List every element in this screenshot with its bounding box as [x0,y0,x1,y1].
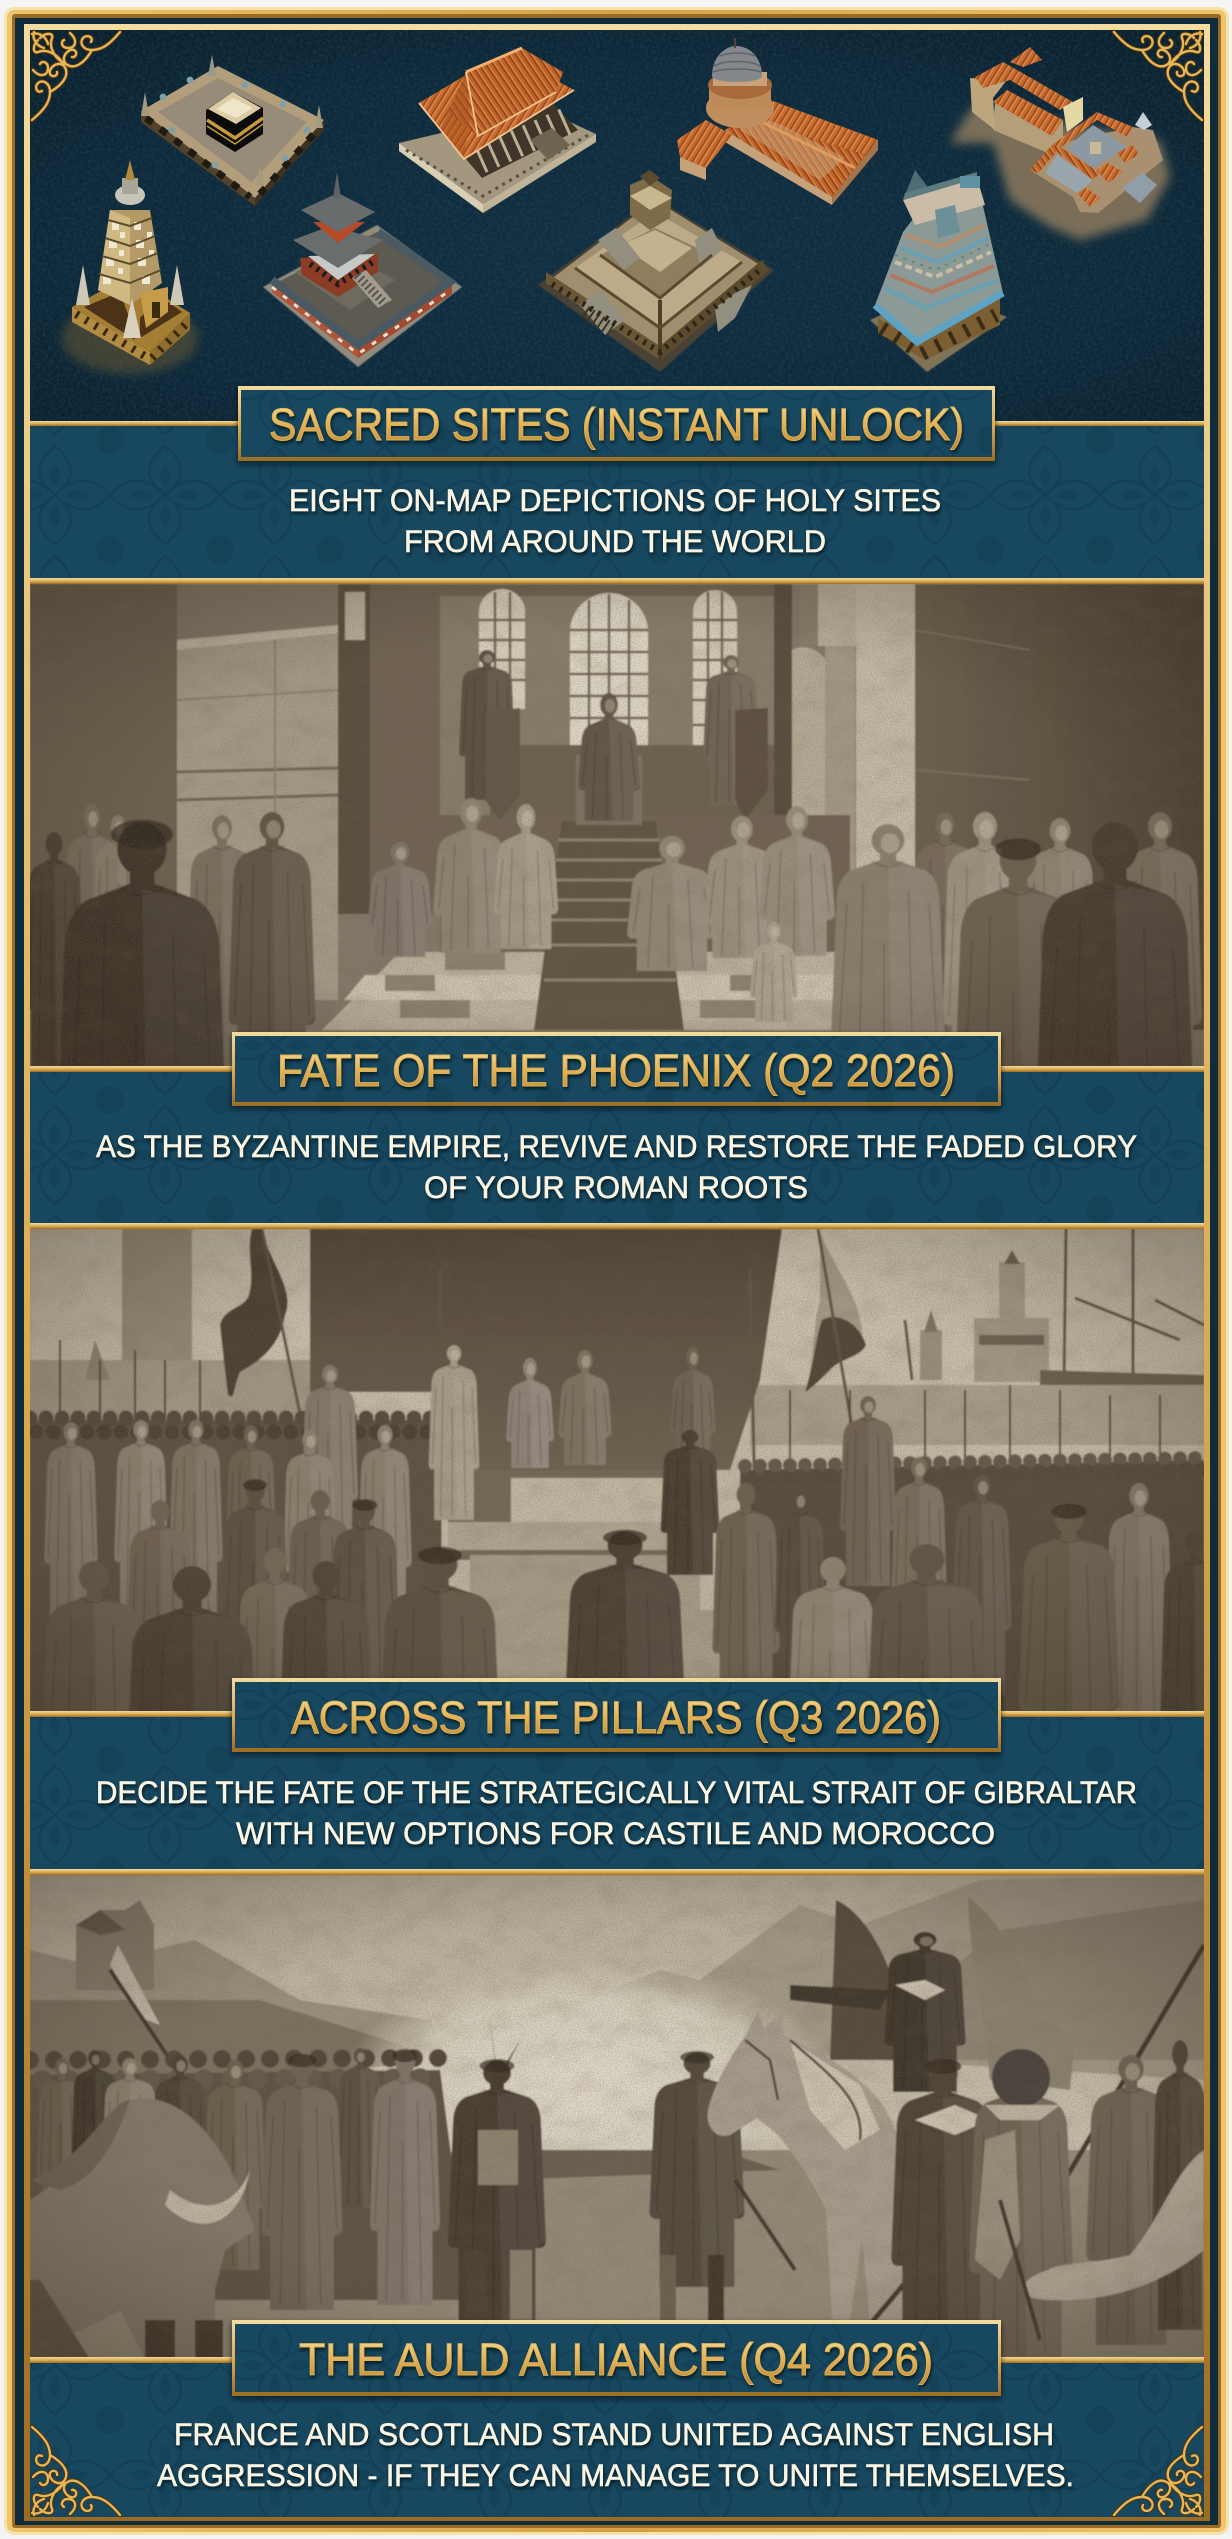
lake [340,1960,840,2210]
corner ornament: top right [1114,32,1202,120]
hills left [30,1940,450,2060]
halberd [110,1945,160,2025]
description band: pillars [30,1711,1204,1875]
corner ornament: bottom left [32,2427,120,2515]
title box: phoenix: FATE OF THE PHOENIX (Q2 2026) [277,1045,955,1096]
heading rule and description band [30,421,1204,584]
title box: sacred sites [238,386,995,461]
soldiers [302,1365,358,1555]
description band: auld alliance [30,2357,1204,2517]
crowd right [916,812,968,1032]
title box: pillars: ACROSS THE PILLARS (Q3 2026) [291,1692,941,1743]
description: phoenix: AS THE BYZANTINE EMPIRE, REVIVE AND RESTORE THE FADED GLORY [96,1128,1137,1164]
building: Mahabodhi temple [62,160,198,374]
description: phoenix [96,1128,1137,1205]
left crowd [30,2070,470,2300]
crowd left [68,804,111,904]
panel: across the pillars [30,1229,1228,1946]
corner ornament: bottom right [1114,2427,1202,2515]
title box: sacred sites: SACRED SITES (INSTANT UNLOCK) [269,399,964,450]
description: auld alliance [157,2416,1074,2493]
description: sacred sites: EIGHT ON-MAP DEPICTIONS OF HOLY SITES [289,482,941,518]
panel: fate of the phoenix [30,584,1204,1229]
corner ornament: top left [32,32,120,120]
building: Venetian palace complex [950,47,1170,240]
painting: Scottish highland parley [30,1875,1208,2360]
horse [707,2010,905,2320]
title box: pillars [232,1678,1001,1752]
canopy [310,1229,782,1470]
dais [448,1470,684,1560]
right soldiers [840,2170,1000,2360]
rider [884,1932,966,2092]
ground [30,2150,1204,2359]
seated council [368,842,432,957]
crowd masses [30,1420,440,1715]
spectators back row [126,1500,194,1730]
description: pillars: DECIDE THE FATE OF THE STRATEGICALLY VITAL STRAIT OF GIBRALTAR [96,1774,1137,1810]
building: Kaaba courtyard [141,55,325,207]
banners [830,1900,905,2060]
description: sacred sites: FROM AROUND THE WORLD [404,523,826,559]
gold tower and ships [974,1318,1049,1382]
title box: phoenix [232,1032,1001,1106]
description: pillars [96,1774,1137,1851]
bull [30,2098,255,2359]
description: phoenix: OF YOUR ROMAN ROOTS [424,1169,808,1205]
description: pillars: WITH NEW OPTIONS FOR CASTILE AND MOROCCO [236,1815,995,1851]
spectators front row [41,1561,147,1881]
title box: auld alliance [232,2320,1001,2396]
building: Chinese temple [399,48,597,214]
envoy [649,2051,745,2287]
navy illustration background [30,30,1204,424]
description: sacred sites [289,482,941,559]
description: auld alliance: FRANCE AND SCOTLAND STAND UNITED AGAINST ENGLISH [174,2416,1054,2452]
description: auld alliance: AGGRESSION - IF THEY CAN MANAGE TO UNITE THEMSELVES. [157,2457,1074,2493]
white sleeved arm [1023,2150,1204,2300]
panel: sacred sites [30,30,1204,584]
guards, emperor [459,650,515,800]
building: Hindu gopuram [870,170,1007,372]
painting: royal court at Gibraltar [30,1229,1228,1946]
title box: auld alliance: THE AULD ALLIANCE (Q4 2026) [299,2334,933,2385]
description band: phoenix [30,1066,1204,1229]
mountains right [560,1875,1204,2080]
building: Japanese pagoda [263,172,462,367]
building: stepped pyramid temple [538,170,774,372]
painting: Byzantine throne room [30,584,1204,1066]
building: domed basilica [677,38,878,205]
castle [76,1900,154,1990]
flags [220,1229,288,1396]
chieftain [488,2010,520,2070]
panel: the auld alliance [30,1875,1208,2517]
